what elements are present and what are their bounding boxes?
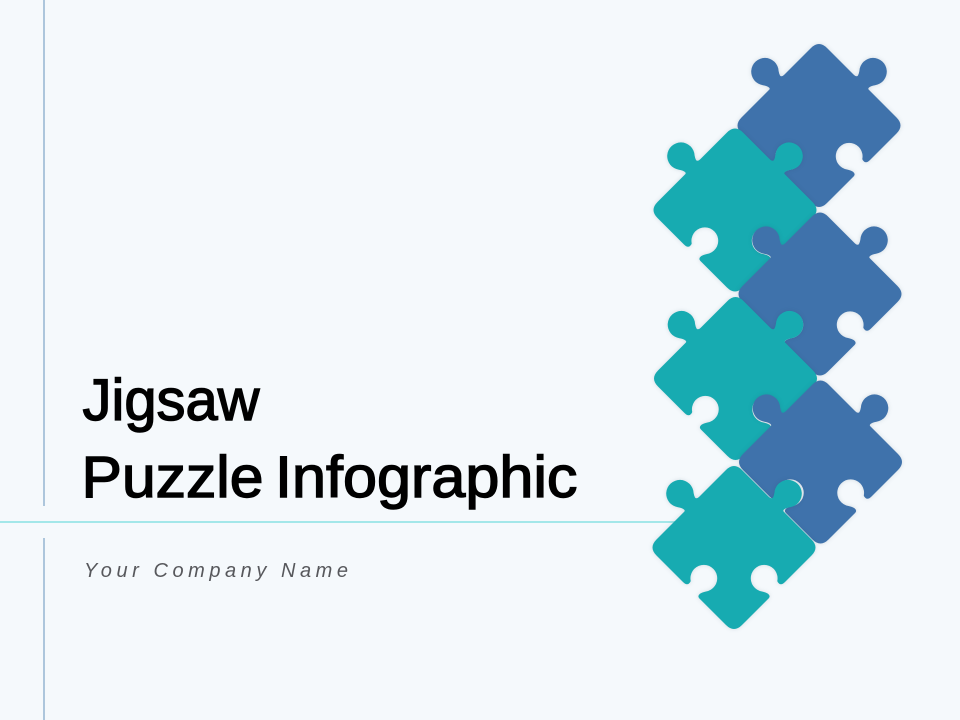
puzzle piece: blue 2 <box>738 212 902 376</box>
puzzle piece: blue 3 <box>739 380 902 544</box>
puzzle piece: teal 2 <box>654 297 817 460</box>
title: Jigsaw <box>82 368 261 433</box>
title: Infographic <box>275 445 578 510</box>
subtitle: company name: Your Company Name <box>84 560 348 582</box>
puzzle piece: blue 1 <box>738 44 900 207</box>
puzzle piece: teal 1 <box>654 128 816 292</box>
title <box>82 368 578 510</box>
title: Puzzle <box>82 445 264 510</box>
puzzle piece stack <box>652 44 902 629</box>
puzzle piece: teal 3 <box>652 466 816 629</box>
